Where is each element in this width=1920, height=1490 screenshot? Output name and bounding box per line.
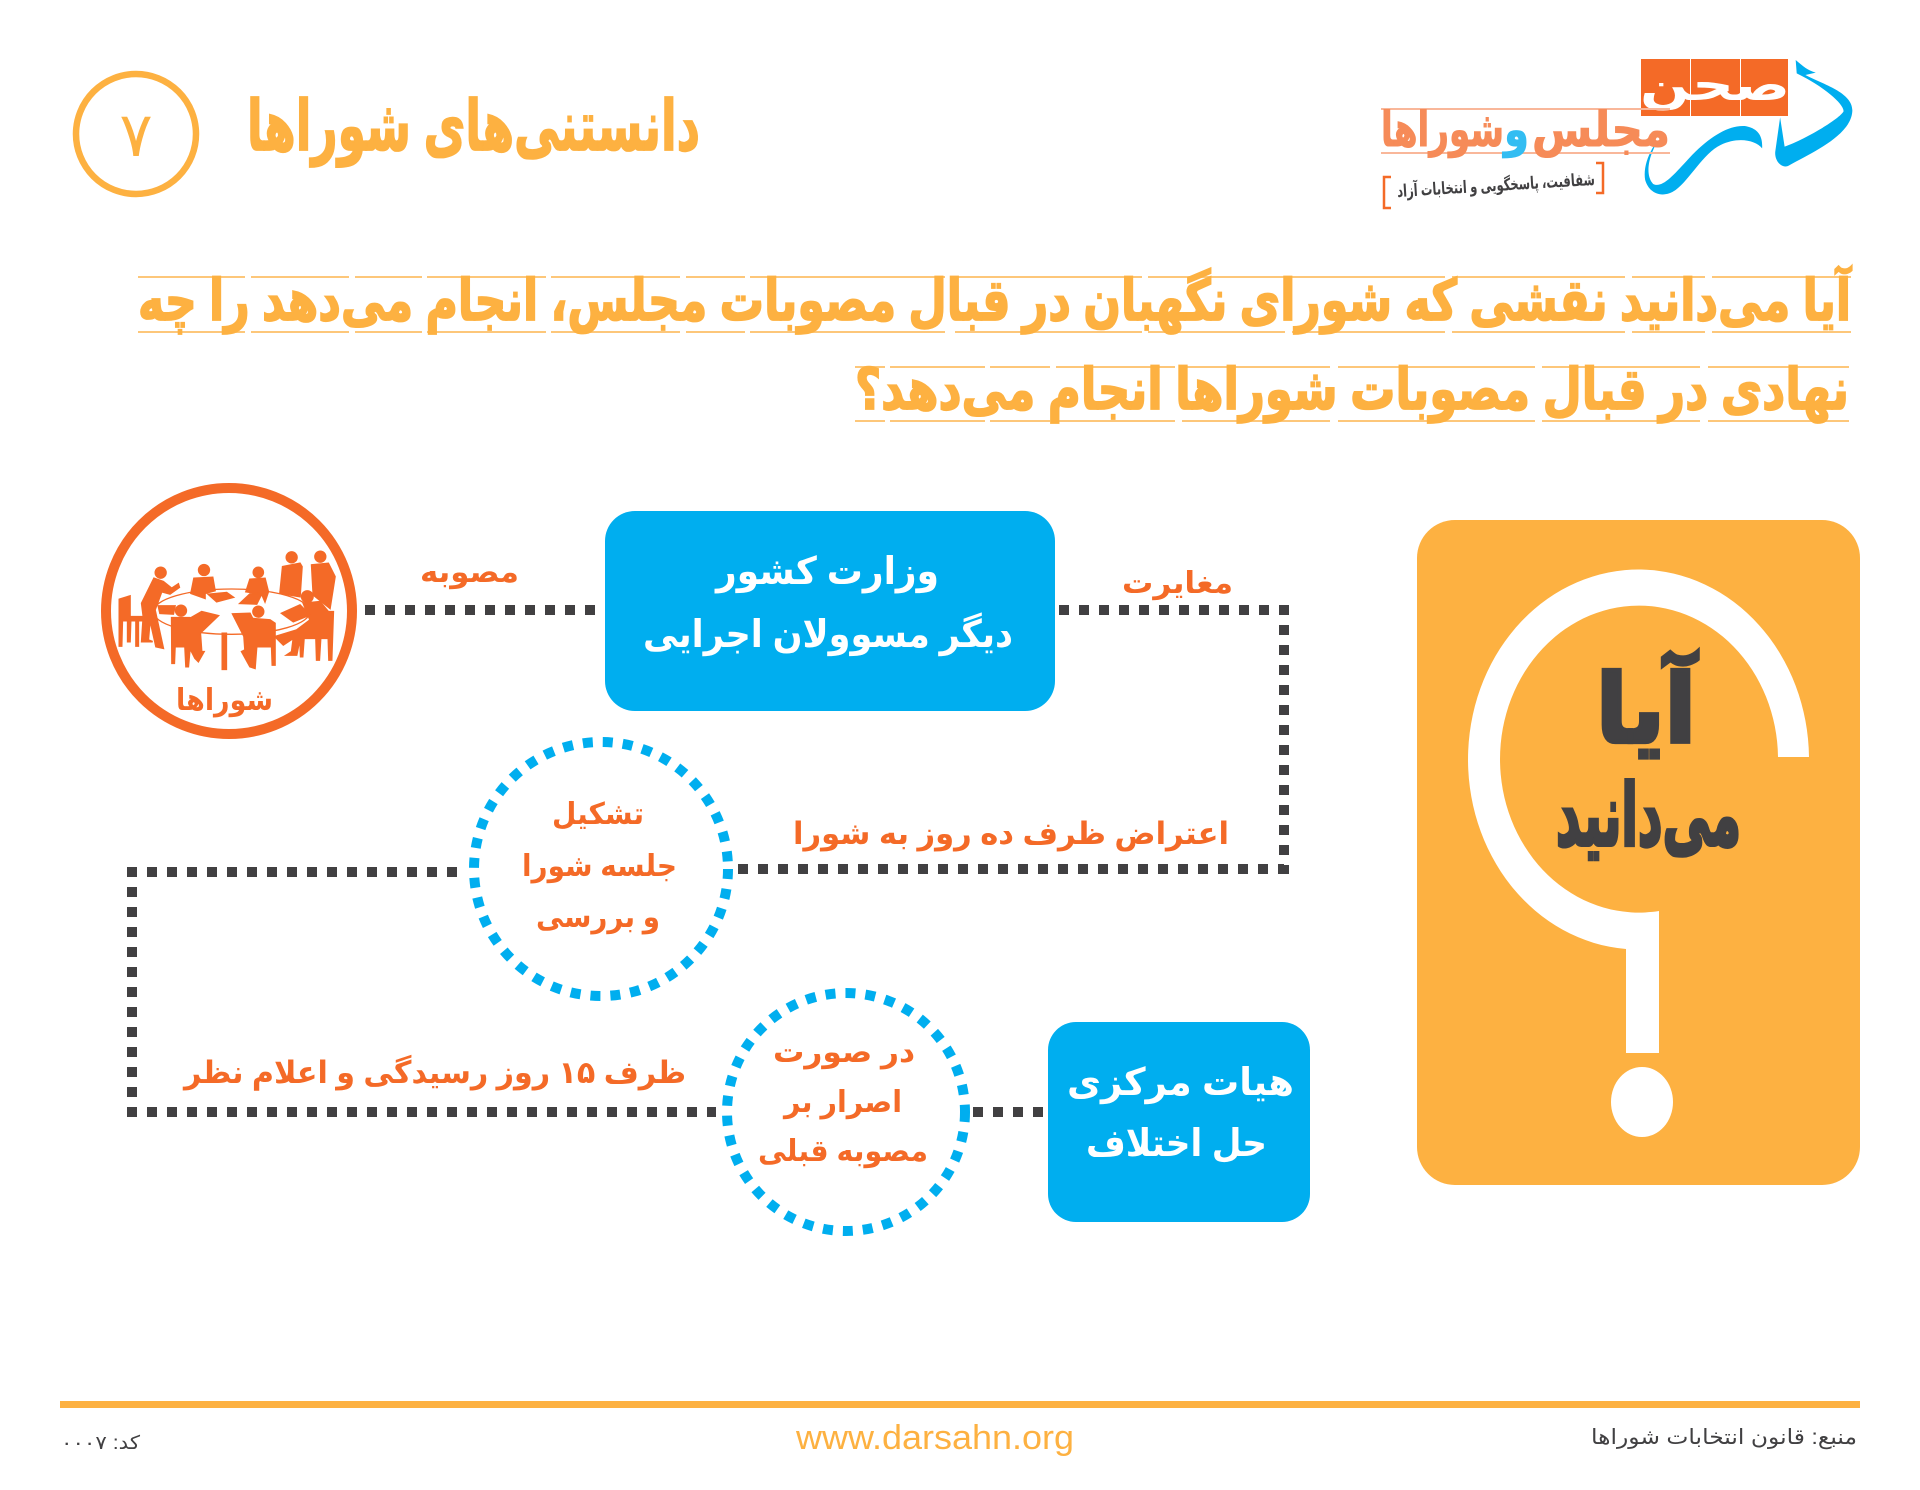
website: www.darsahn.org [795,1419,1074,1457]
label: objection within ten days: اعتراض ظرف ده روز به شورا [793,816,1229,852]
connector: meeting to decision [132,872,716,1112]
council label: شوراها [176,684,273,717]
code: کد: ۰۰۰۷ [61,1433,141,1454]
box: dispute resolution board [1048,1022,1310,1222]
circle: insistence on prior approval: اصرار بر [782,1086,902,1119]
connector: council to ministry [365,605,600,615]
footer rule [60,1401,1860,1408]
box: dispute resolution board: هیات مرکزی [1067,1062,1294,1104]
icon: question mark [1468,570,1809,1137]
logo name: و [1502,104,1529,158]
circle: insistence on prior approval [727,993,965,1231]
logo name: شوراها [1381,104,1504,158]
number badge [76,74,196,194]
connector: ministry to meeting [738,610,1284,869]
connector: decision to board [973,1107,1047,1117]
logo [1381,59,1852,208]
logo name [1381,104,1670,158]
logo orange block [1640,59,1790,116]
logo orange block: صحن [1640,61,1790,111]
source: منبع: قانون انتخابات شوراها [1591,1426,1857,1449]
box: ministry [605,511,1055,711]
box: dispute resolution board: حل اختلاف [1086,1123,1267,1165]
circle: council session [474,742,728,996]
label: conflict: مغایرت [1122,567,1233,600]
logo tagline: شفافیت، پاسخگویی و انتخابات آزاد [1396,168,1595,202]
circle: insistence on prior approval: در صورت [773,1036,915,1069]
logo tagline [1384,163,1603,208]
box: ministry: دیگر مسوولان اجرایی [643,612,1013,657]
did you know text: می‌دانید [1556,769,1741,864]
council circle with people icon [106,488,352,734]
did you know text: آیا [1596,652,1698,762]
did you know text [1556,652,1741,864]
label: approval: مصوبه [420,556,519,589]
circle: council session: جلسه شورا [522,850,677,883]
circle: council session: تشکیل [552,798,644,831]
box: ministry: وزارت کشور [714,551,939,594]
logo name: مجلس [1532,104,1670,157]
logo mark: blue calligraphy [1645,60,1852,194]
circle: council session: و بررسی [536,901,660,935]
icon: meeting around a table [119,551,335,669]
number badge: ۷ [119,101,153,170]
panel: did you know [1417,520,1860,1185]
label: review within fifteen days: ظرف ۱۵ روز رسیدگی و اعلام نظر [182,1054,686,1091]
circle: insistence on prior approval: مصوبه قبلی [758,1135,928,1168]
title: دانستنی‌های شوراها [247,87,700,167]
question heading [138,265,1852,423]
